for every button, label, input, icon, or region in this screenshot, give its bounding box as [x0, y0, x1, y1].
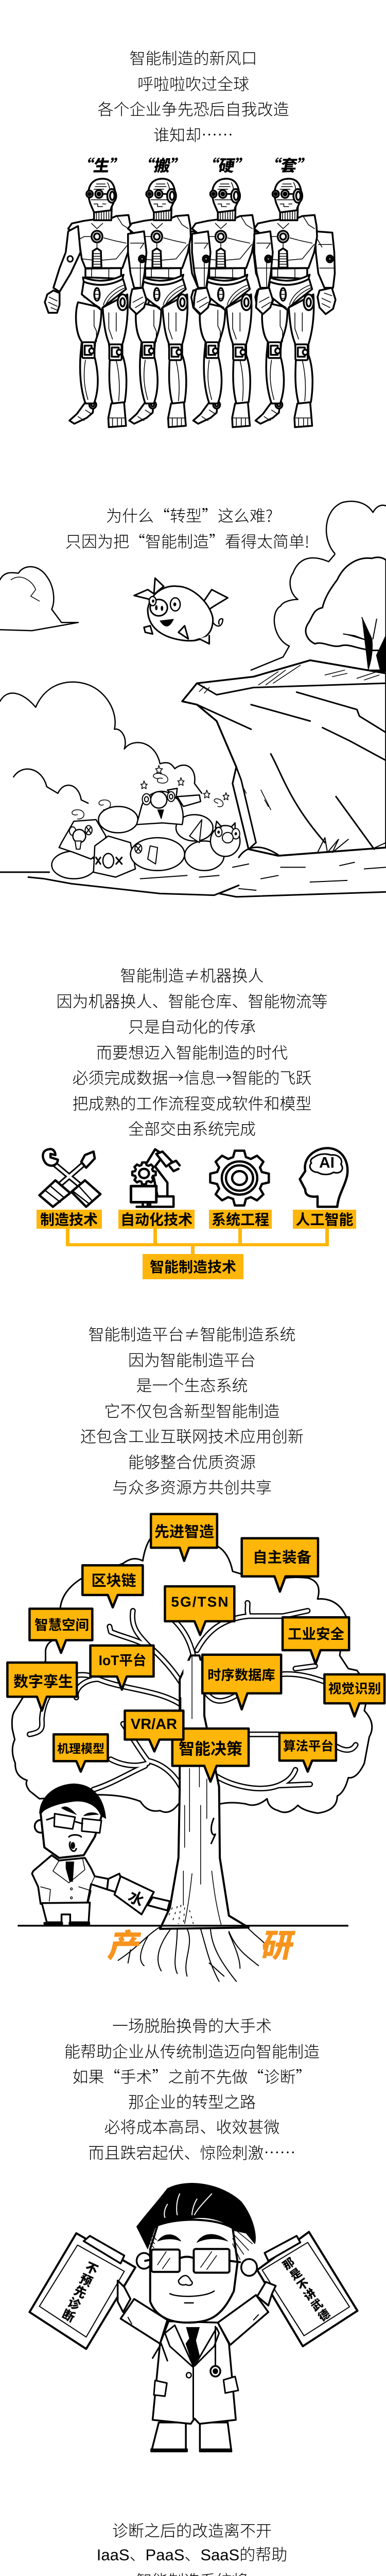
- bubble: algorithm platform: 算法平台: [283, 1736, 334, 1755]
- paragraph: big surgery: [64, 2013, 320, 2163]
- paragraph: platform is not a system: [80, 1322, 304, 1498]
- bubble: mechanism model: 机理模型: [57, 1739, 104, 1756]
- tag: smart manufacturing technology: [143, 1254, 243, 1279]
- tag: systems engineering: 系统工程: [212, 1209, 269, 1229]
- icon: AI head: AI: [319, 1154, 335, 1172]
- bubble: VR/AR: VR/AR: [131, 1716, 177, 1733]
- bubble: smart decision: 智能决策: [179, 1736, 242, 1759]
- illustration: doctor holding two clipboards: 不: [83, 2257, 101, 2278]
- illustration: doctor holding two clipboards: 是: [286, 2264, 305, 2283]
- labels above robots: “生”: [76, 153, 128, 176]
- orange word: production: 产: [104, 1920, 147, 1967]
- heading: why transformation is hard: 为什么“转型”这么难?: [106, 503, 273, 527]
- paragraph: after diagnosis: 诊断之后的改造离不开: [112, 2518, 272, 2541]
- paragraph: big surgery: 如果“手术”之前不先做“诊断”: [72, 2064, 312, 2088]
- icon: flying pig: [134, 578, 227, 644]
- labels above robots: [76, 153, 315, 176]
- bubble: advanced manufacturing: 先进智造: [154, 1520, 214, 1541]
- paragraph: big surgery: 一场脱胎换骨的大手术: [112, 2013, 272, 2036]
- paragraph: smart manufacturing is not machine replacement: 全部交由系统完成: [128, 1116, 256, 1140]
- bubble: IoT platform: IoT平台: [99, 1653, 146, 1668]
- illustration: man in suit watering the tree: [32, 1784, 170, 1925]
- paragraph: platform is not a system: 是一个生态系统: [136, 1372, 248, 1396]
- illustration: doctor holding two clipboards: 那: [279, 2253, 297, 2273]
- title paragraph: new wave of smart manufacturing: 谁知却……: [153, 123, 233, 145]
- illustration: tree branches: [29, 1603, 356, 1789]
- bubble: industrial security: 工业安全: [288, 1622, 344, 1643]
- bubble: 5G/TSN: [165, 1586, 234, 1635]
- bubble: digital twin: 数字孪生: [13, 1670, 73, 1691]
- illustration: tree canopy: [12, 1537, 372, 1813]
- icon: gear: [210, 1150, 269, 1206]
- title paragraph: new wave of smart manufacturing: 呼啦啦吹过全球: [137, 71, 249, 95]
- title paragraph: new wave of smart manufacturing: 智能制造的新风口: [130, 45, 257, 69]
- bubble: smart decision: [172, 1728, 249, 1782]
- labels above robots: “套”: [264, 153, 315, 176]
- paragraph: platform is not a system: 智能制造平台≠智能制造系统: [89, 1322, 295, 1345]
- paragraph: platform is not a system: 因为智能制造平台: [128, 1348, 256, 1370]
- bubble: algorithm platform: [279, 1733, 336, 1772]
- paragraph: smart manufacturing is not machine replacement: [57, 963, 327, 1140]
- paragraph: platform is not a system: 能够整合优质资源: [128, 1450, 256, 1472]
- paragraph: big surgery: 能帮助企业从传统制造迈向智能制造: [64, 2039, 320, 2062]
- connector lines between technology tags: [66, 1226, 329, 1257]
- bubble: visual recognition: [324, 1674, 384, 1717]
- labels above robots: “硬”: [201, 153, 253, 176]
- illustration: clouds, cliff and tree: [0, 501, 386, 897]
- illustration: doctor holding two clipboards: 诊: [65, 2292, 84, 2314]
- bubble: mechanism model: [54, 1734, 108, 1772]
- paragraph: platform is not a system: 它不仅包含新型智能制造: [104, 1398, 280, 1422]
- bubble: time-series database: 时序数据库: [207, 1664, 275, 1684]
- paragraph: smart manufacturing is not machine replacement: 因为机器换人、智能仓库、智能物流等: [57, 989, 327, 1012]
- paragraph: big surgery: 必将成本高昂、收效甚微: [104, 2114, 280, 2138]
- illustration: doctor holding two clipboards: 断: [60, 2304, 78, 2326]
- illustration: four robots: [45, 179, 336, 427]
- paragraph: smart manufacturing is not machine replacement: 把成熟的工作流程变成软件和模型: [72, 1091, 312, 1114]
- icon: AI head: [300, 1148, 347, 1207]
- paragraph: after diagnosis: [64, 2518, 320, 2576]
- illustration: man in suit watering the tree: 水: [125, 1884, 149, 1911]
- title paragraph: new wave of smart manufacturing: 各个企业争先恐后自我改造: [98, 97, 289, 120]
- illustration: doctor holding two clipboards: 武: [307, 2295, 326, 2314]
- heading: why transformation is hard: [65, 503, 309, 552]
- bubble: IoT platform: [91, 1646, 153, 1690]
- bubble: autonomous equipment: 自主装备: [253, 1546, 311, 1567]
- paragraph: smart manufacturing is not machine replacement: 而要想迈入智能制造的时代: [96, 1040, 288, 1063]
- bubble: smart space: 智慧空间: [34, 1614, 89, 1634]
- orange word: research: 研: [257, 1920, 300, 1967]
- tag: manufacturing technology: 制造技术: [40, 1209, 98, 1229]
- bubble: time-series database: [202, 1655, 281, 1709]
- bubble: blockchain: 区块链: [91, 1569, 136, 1590]
- illustration: doctor holding two clipboards: 预: [77, 2268, 96, 2290]
- title paragraph: new wave of smart manufacturing: [98, 45, 289, 145]
- illustration: doctor holding two clipboards: 先: [72, 2280, 90, 2302]
- illustration: doctor holding two clipboards: 讲: [300, 2284, 319, 2304]
- paragraph: after diagnosis: IaaS、PaaS、SaaS的帮助: [97, 2546, 287, 2564]
- paragraph: platform is not a system: 还包含工业互联网技术应用创新: [80, 1424, 304, 1447]
- bubble: smart space: [29, 1608, 92, 1653]
- bubble: digital twin: [7, 1663, 77, 1710]
- paragraph: smart manufacturing is not machine replacement: 智能制造≠机器换人: [120, 963, 264, 986]
- labels above robots: “搬”: [137, 153, 188, 176]
- bubble: VR/AR: [125, 1710, 183, 1751]
- tag: artificial intelligence: 人工智能: [295, 1209, 354, 1229]
- paragraph: big surgery: 那企业的转型之路: [128, 2090, 256, 2112]
- illustration: pile of fallen pigs: [51, 766, 240, 879]
- bubble: industrial security: [283, 1617, 349, 1664]
- paragraph: big surgery: 而且跌宕起伏、惊险刺激……: [89, 2140, 295, 2163]
- paragraph: smart manufacturing is not machine replacement: 必须完成数据→信息→智能的飞跃: [72, 1065, 312, 1088]
- paragraph: smart manufacturing is not machine replacement: 只是自动化的传承: [128, 1014, 256, 1038]
- bubble: advanced manufacturing: [151, 1514, 217, 1561]
- illustration: doctor holding two clipboards: [29, 2183, 357, 2452]
- tag: smart manufacturing technology: 智能制造技术: [150, 1256, 236, 1277]
- bubble: visual recognition: 视觉识别: [328, 1679, 381, 1697]
- bubble: 5G/TSN: 5G/TSN: [171, 1594, 230, 1609]
- illustration: doctor holding two clipboards: 德: [314, 2305, 333, 2325]
- illustration: tree trunk and roots: [19, 1655, 347, 1981]
- illustration: doctor holding two clipboards: 不: [293, 2274, 312, 2294]
- paragraph: platform is not a system: 与众多资源方共创共享: [112, 1475, 272, 1498]
- heading: why transformation is hard: 只因为把“智能制造”看得太简单!: [65, 529, 309, 552]
- icon: robot arm with gear and monitor: [131, 1149, 180, 1207]
- bubble: blockchain: [82, 1565, 143, 1607]
- icon: crossed wrench and screwdriver in fists: [40, 1149, 100, 1207]
- bubble: autonomous equipment: [242, 1538, 318, 1591]
- tag: automation technology: 自动化技术: [120, 1209, 192, 1229]
